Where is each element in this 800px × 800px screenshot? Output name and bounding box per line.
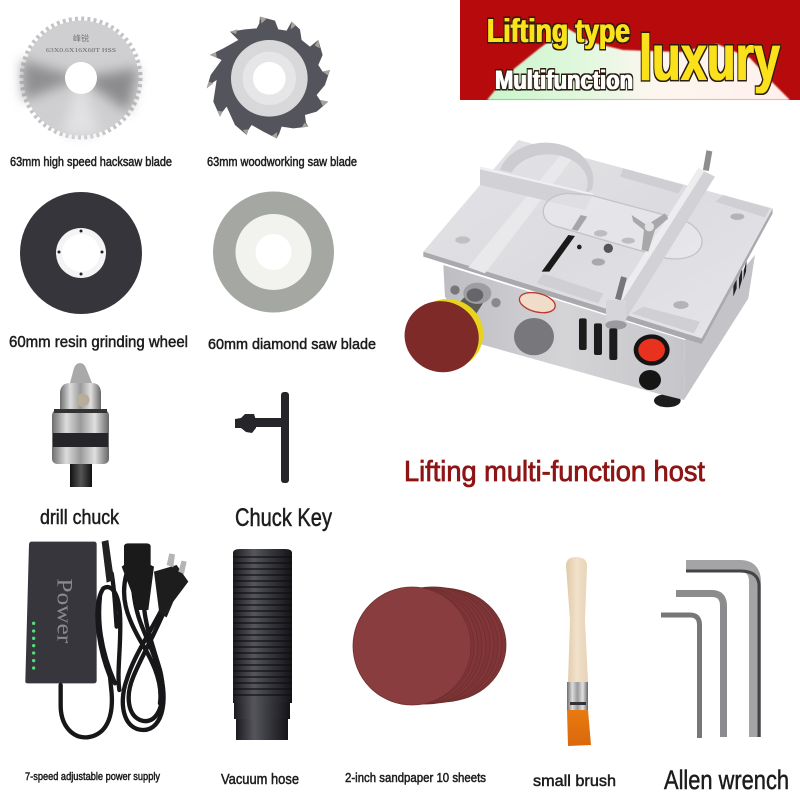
sanding disc — [411, 299, 483, 369]
miter slot — [468, 152, 575, 273]
banner heading: Multifunction: Multifunction — [495, 65, 633, 95]
adapter box — [25, 542, 97, 683]
IEC plug — [122, 543, 154, 610]
rail bar — [607, 168, 715, 323]
icon: main lifting table saw host — [394, 140, 773, 407]
label: small brush: small brush — [533, 773, 616, 790]
foot — [654, 394, 681, 407]
label: diamond saw blade: 60mm diamond saw blade — [208, 336, 376, 353]
top bolt — [703, 150, 712, 171]
icon: hacksaw blade — [22, 19, 140, 137]
icon: allen wrench set — [661, 566, 759, 738]
label: hacksaw blade: 63mm high speed hacksaw blade — [10, 154, 172, 169]
label: drill chuck: drill chuck — [40, 507, 120, 529]
label: vacuum hose: Vacuum hose — [221, 771, 299, 788]
icon: small brush — [566, 557, 591, 746]
icon: sandpaper stack — [353, 587, 506, 705]
icon: drill chuck — [52, 363, 109, 487]
tabletop edge — [423, 208, 773, 344]
icon: diamond saw blade — [213, 192, 334, 312]
blade engraving: 峰锐 — [73, 33, 89, 43]
banner heading: Lifting type: Lifting type — [487, 12, 630, 49]
fence — [480, 167, 593, 210]
heading: lifting multi-function host: Lifting multi-function host — [404, 456, 705, 488]
saw slot — [542, 235, 575, 272]
label: woodworking saw blade: 63mm woodworking saw blade — [207, 154, 357, 169]
icon: woodworking saw blade — [207, 17, 330, 138]
cables — [61, 573, 167, 737]
label: power supply: 7-speed adjustable power supply — [25, 771, 160, 783]
label: resin grinding wheel: 60mm resin grinding wheel — [9, 334, 188, 351]
sticker — [517, 289, 557, 316]
tabletop — [423, 140, 773, 338]
body side — [684, 255, 755, 400]
voltage LEDs — [32, 622, 35, 670]
screws — [455, 236, 470, 244]
ruler marks — [620, 168, 683, 193]
DC plug — [102, 540, 114, 583]
label: chuck key: Chuck Key — [235, 504, 332, 532]
icon: vacuum hose — [233, 549, 292, 740]
body front — [443, 265, 685, 400]
dust port — [514, 318, 554, 355]
icon: hacksaw blade: 63X0.6X16X60T HSS — [46, 47, 116, 54]
lower bolt — [615, 276, 627, 300]
acrylic guard — [543, 193, 702, 259]
icon: chuck key — [235, 392, 289, 483]
icon: power supply — [25, 540, 188, 737]
label: sandpaper: 2-inch sandpaper 10 sheets — [345, 770, 486, 785]
spindle — [455, 293, 485, 318]
adapter brand: Power — [52, 578, 77, 644]
wing nut — [632, 213, 668, 252]
banner: product type — [460, 0, 800, 100]
icon: resin grinding wheel — [20, 192, 142, 314]
protractor — [500, 143, 593, 193]
vents — [579, 318, 587, 350]
wall plug — [154, 565, 188, 617]
power jack — [639, 370, 661, 390]
power switch — [634, 334, 670, 366]
